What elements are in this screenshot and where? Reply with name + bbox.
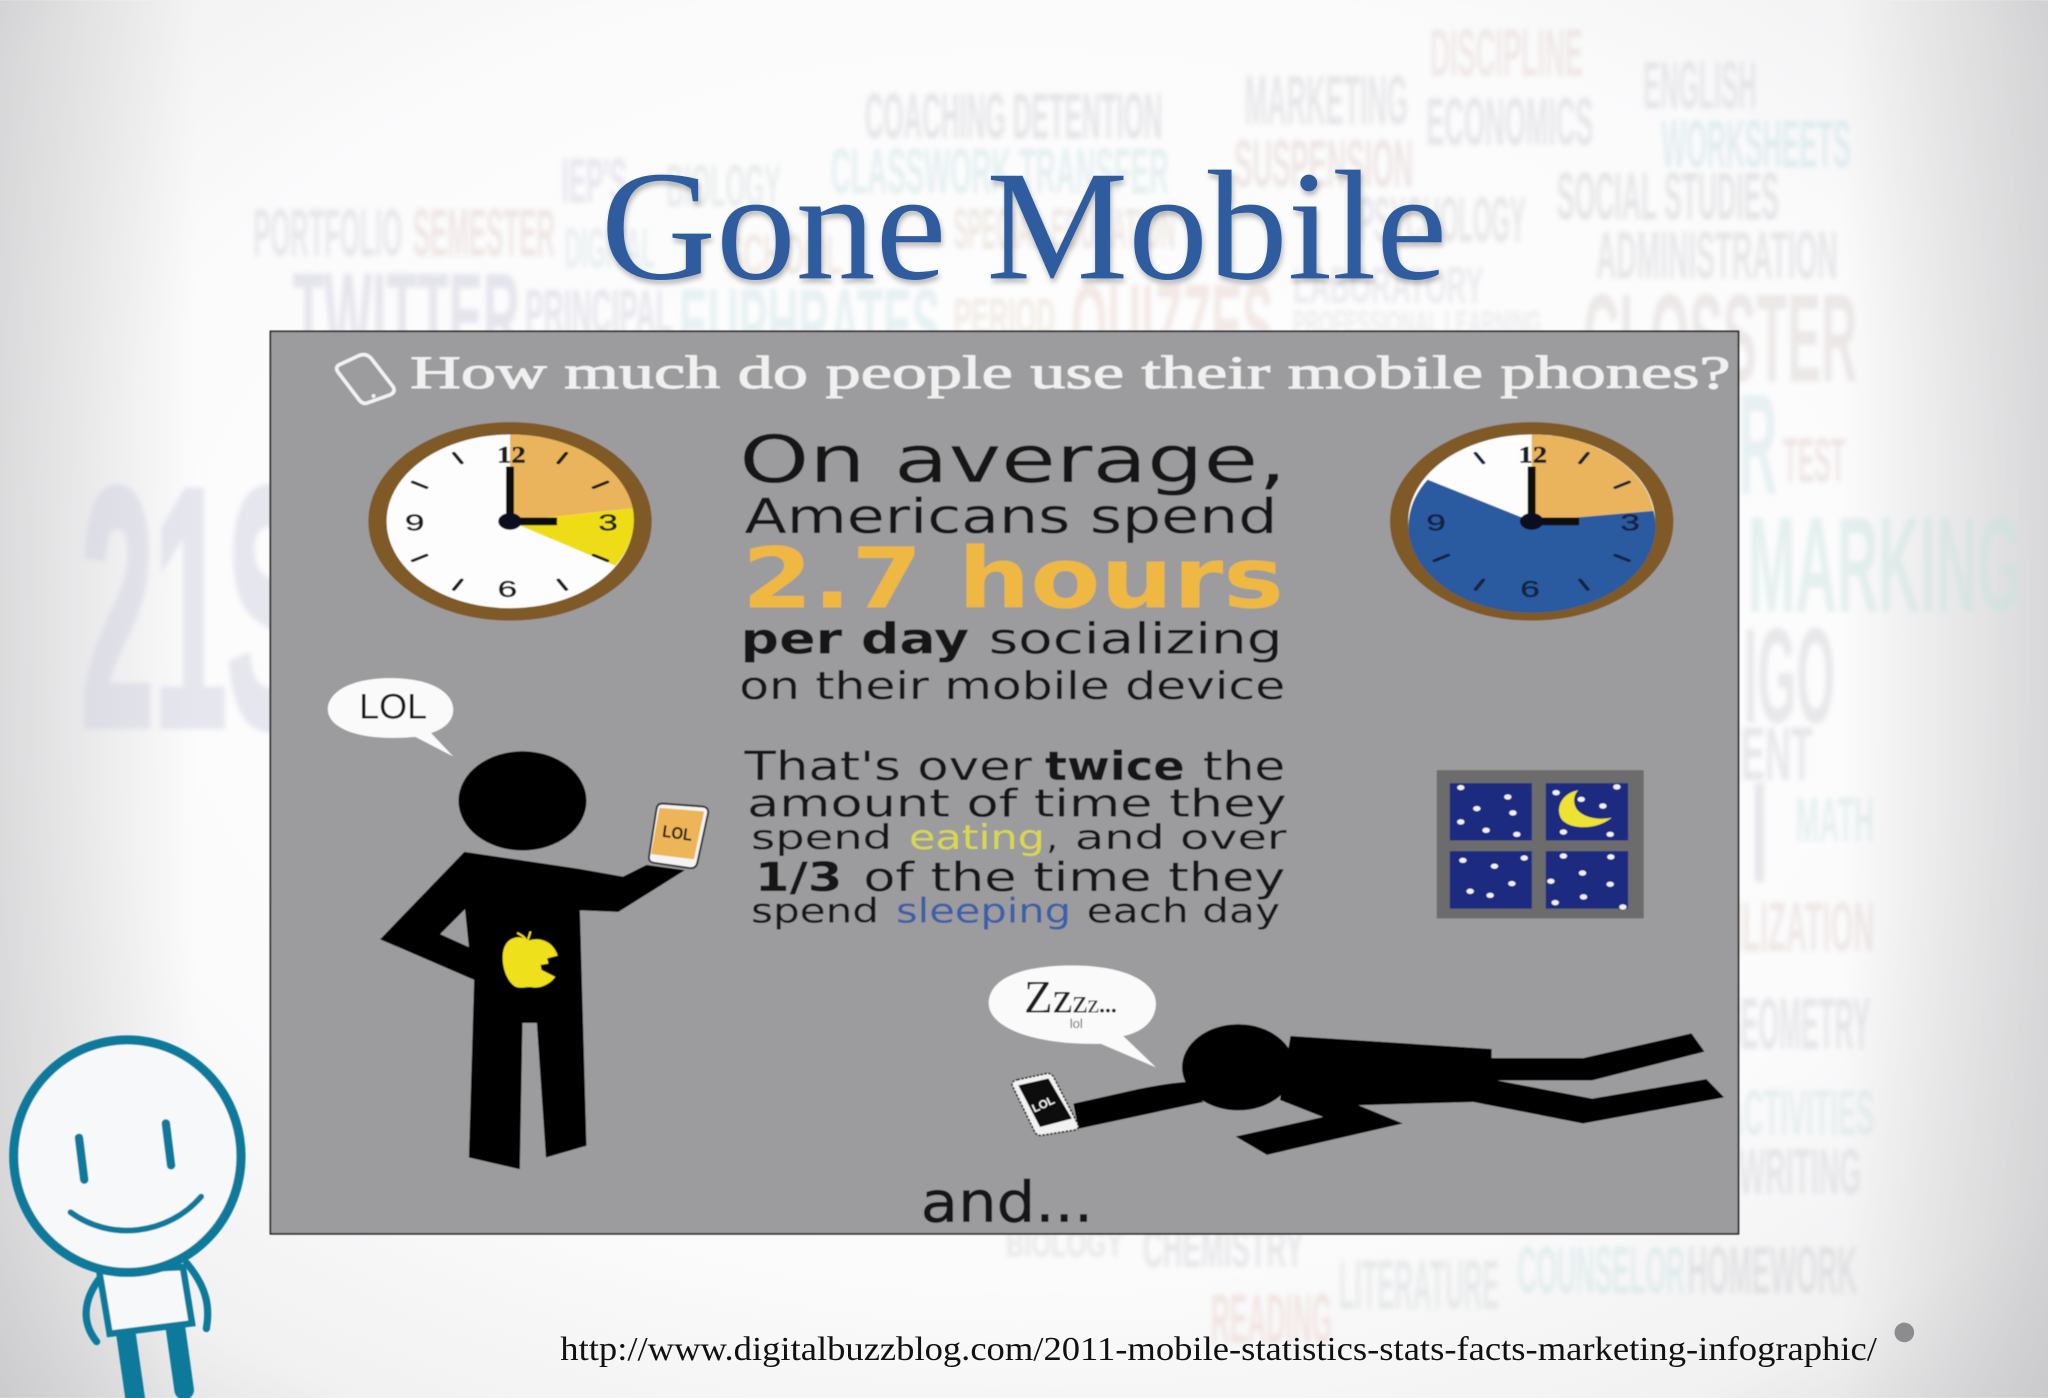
source url: http://www.digitalbuzzblog.com/2011-mobile-statistics-stats-facts-marketing-infographic/	[560, 1331, 1878, 1368]
background word cloud: PERIOD	[953, 289, 1055, 347]
panel background	[270, 331, 1738, 1234]
text block: on average: socializing	[989, 614, 1283, 664]
clock numbers: 3	[1620, 510, 1640, 536]
wedge: orange	[1532, 435, 1654, 521]
speech bubble: Zzz	[989, 965, 1156, 1067]
clock: right, time sleeping	[1390, 422, 1673, 621]
icon: phone outline	[337, 355, 394, 403]
background word cloud: READING	[1211, 1279, 1332, 1358]
figure: standing man with phone	[380, 751, 708, 1169]
background word cloud: DIGITAL	[564, 217, 656, 281]
background word cloud: ECONOMICS	[1426, 85, 1593, 160]
clock numbers: 9	[405, 510, 424, 536]
speech bubble: LOL	[328, 678, 453, 756]
background word cloud: BIOLOGY	[1006, 1223, 1123, 1266]
clock numbers: 12	[497, 443, 526, 469]
icon: night window	[1437, 770, 1644, 918]
background word cloud: R	[1738, 365, 1778, 525]
speech bubble: Zzz: lol	[1070, 1016, 1083, 1031]
background word cloud: DISCIPLINE	[1430, 16, 1583, 91]
background word cloud: SPECIAL EDUCATION	[953, 197, 1176, 261]
text block: comparison: That's over	[743, 742, 1032, 790]
text block: comparison: eating	[909, 818, 1045, 858]
text block: comparison: 1/3	[755, 853, 842, 901]
stars	[1457, 784, 1627, 910]
background word cloud: SCHOOL	[725, 224, 842, 288]
background word cloud: IEP'S	[562, 147, 627, 217]
clock numbers	[405, 443, 618, 602]
moon	[1559, 790, 1612, 827]
title: Gone Mobile	[601, 138, 1447, 312]
clock ticks	[1434, 453, 1629, 589]
background word cloud: PRINCIPAL	[525, 277, 673, 347]
text block: comparison: amount of time they	[747, 782, 1287, 826]
text block: on average: On average,	[739, 422, 1287, 498]
clock numbers: 6	[498, 576, 517, 602]
background word cloud: IGO	[1744, 600, 1835, 752]
wedge: orange	[510, 435, 633, 521]
background word cloud: MARKETING	[1245, 60, 1408, 139]
clock numbers	[1426, 443, 1640, 602]
text block: comparison: and over	[1075, 818, 1287, 858]
text block: comparison: spend	[751, 818, 892, 858]
figure: sleeping man with phone	[1012, 1024, 1724, 1155]
background word cloud: WRITING	[1738, 1135, 1861, 1208]
background word cloud: LABORATORY	[1293, 257, 1484, 315]
background word cloud: SUSPENSION	[1234, 127, 1413, 202]
mascot: smiling character	[14, 1040, 241, 1398]
mascot head	[14, 1040, 241, 1272]
text block: comparison: twice	[1045, 742, 1185, 790]
icon: apple logo	[504, 931, 556, 987]
text block: comparison: of the time they	[863, 853, 1285, 901]
background word cloud: QUIZZES	[1071, 260, 1273, 391]
text block: comparison: the	[1203, 742, 1285, 790]
closing text: and: and...	[921, 1170, 1093, 1235]
text block: comparison: ,	[1046, 818, 1058, 858]
phone on floor: LOL	[1030, 1094, 1057, 1116]
background word cloud: LITERATURE	[1339, 1245, 1499, 1324]
phone in hand	[649, 803, 708, 868]
clock hands	[510, 467, 557, 521]
background word cloud: PORTFOLIO	[253, 196, 402, 271]
speech bubble: LOL: LOL	[359, 688, 427, 727]
background word cloud: CHEMISTRY	[1143, 1217, 1304, 1279]
background word cloud: PSYCHOLOGY	[1358, 183, 1526, 256]
background word cloud: COUNSELOR	[1518, 1233, 1685, 1308]
mascot body	[99, 1267, 192, 1334]
phone in hand: LOL	[661, 822, 694, 845]
background word cloud: BIOLOGY	[666, 153, 781, 220]
clock numbers: 6	[1520, 576, 1540, 602]
background word cloud: PROFESSIONAL LEARNING	[1293, 305, 1541, 343]
clock numbers: 12	[1518, 443, 1547, 469]
mascot smile	[71, 1197, 201, 1231]
panel: infographic	[270, 331, 1738, 1235]
clock: left, time socializing	[368, 422, 652, 621]
background word cloud: COACHING DETENTION	[865, 80, 1162, 153]
text block: comparison: sleeping	[896, 891, 1071, 931]
speech bubble: Zzz: Zzzz...	[1024, 971, 1117, 1023]
clock numbers: 3	[598, 510, 618, 536]
slide bullet dot	[1895, 1323, 1914, 1342]
wedge: yellow	[510, 508, 634, 566]
statistic: 2.7 hours: 2.7 hours	[742, 530, 1284, 628]
background word cloud: 21ST	[81, 418, 394, 797]
clock numbers: 9	[1426, 510, 1446, 536]
background word cloud: ENGLISH	[1643, 49, 1757, 124]
text block: on average	[739, 422, 1287, 708]
mascot legs	[125, 1325, 184, 1398]
phone on floor	[1012, 1073, 1078, 1136]
text block: comparison: each day	[1087, 891, 1280, 931]
clock hands	[1532, 467, 1579, 521]
background word cloud: SEMESTER	[413, 196, 555, 271]
text block: comparison: spend	[751, 891, 879, 931]
header question: How much do people use their mobile phones?	[410, 347, 1731, 399]
wedge: blue	[1409, 480, 1655, 613]
background word cloud: EUPHRATES	[679, 267, 940, 381]
mascot eyes	[79, 1123, 171, 1180]
text block: on average: per day	[741, 614, 969, 664]
background word cloud: TEST	[1783, 426, 1846, 496]
background word cloud: MATH	[1796, 785, 1874, 855]
background word cloud: CLASSWORK TRANSFER	[831, 135, 1169, 208]
background word cloud: MENT	[1711, 712, 1813, 797]
background word cloud: TWITTER	[293, 248, 520, 386]
text block: on average: on their mobile device	[739, 664, 1285, 708]
background word cloud: I	[1750, 753, 1768, 913]
text block: comparison	[743, 742, 1287, 931]
mascot arms	[86, 1263, 208, 1342]
text block: on average: Americans spend	[744, 489, 1277, 545]
clock ticks	[413, 453, 607, 589]
